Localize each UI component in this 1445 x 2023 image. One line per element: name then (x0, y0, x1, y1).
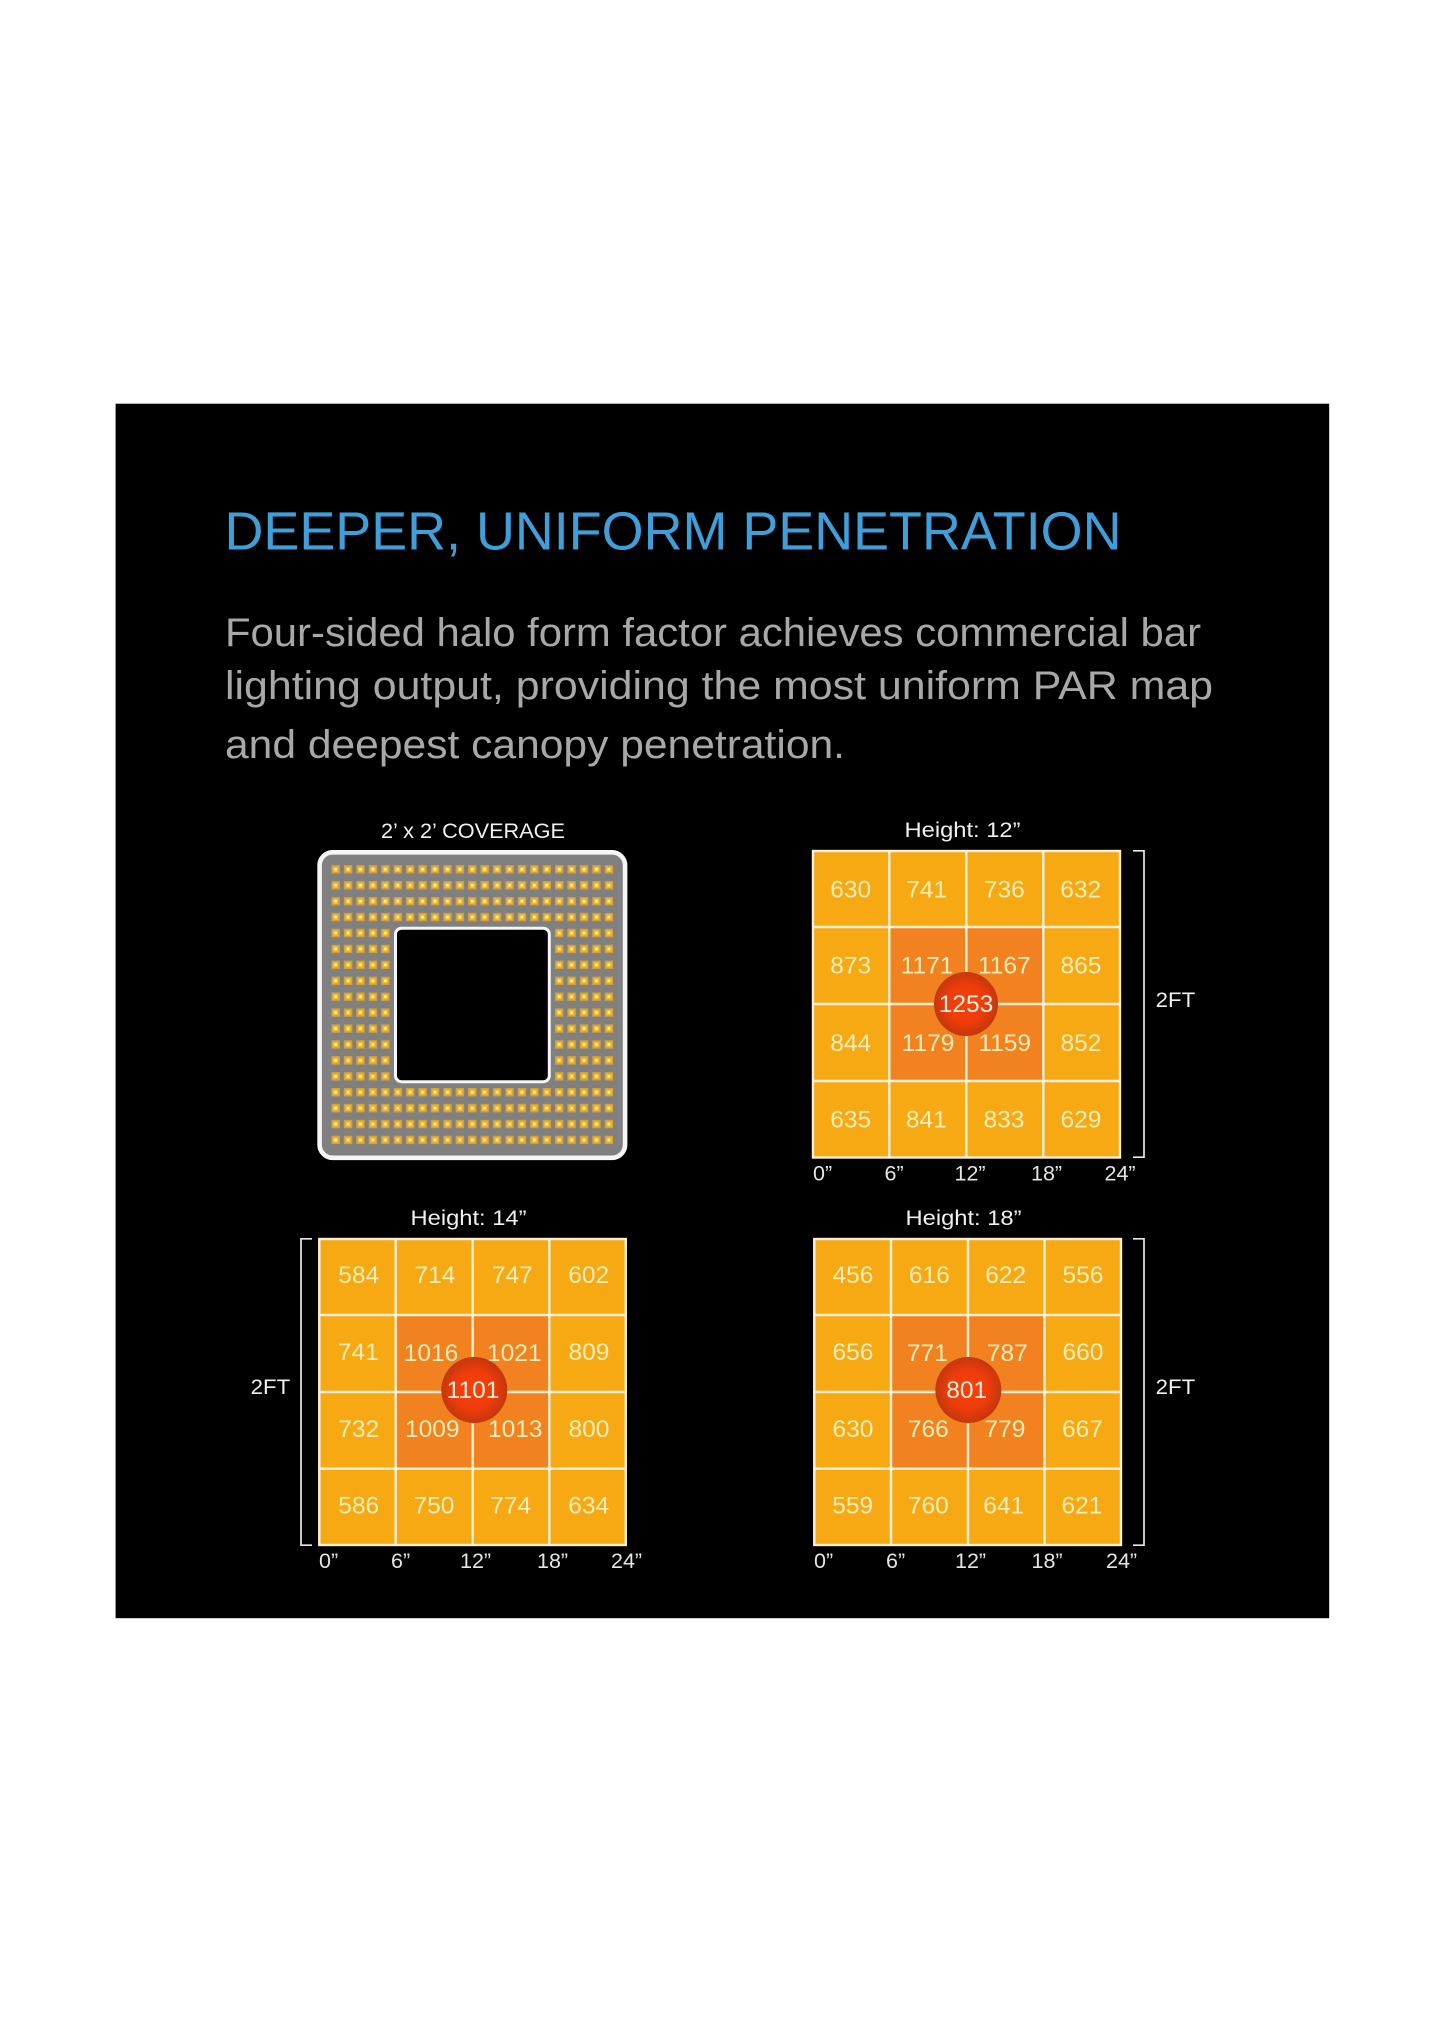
cell values: 456 (833, 1262, 873, 1289)
cell values: 622 (985, 1262, 1026, 1289)
halo light board (320, 852, 625, 1158)
axis labels (814, 1549, 1137, 1573)
grid lines (813, 1238, 1122, 1546)
label: 2FT: 2FT (1156, 1375, 1195, 1399)
axis labels (319, 1549, 642, 1573)
cell values: 1179 (902, 1030, 954, 1057)
cell values: 774 (490, 1492, 531, 1519)
cell values: 841 (906, 1106, 947, 1134)
axis labels: 18” (1031, 1162, 1062, 1186)
axis labels: 18” (537, 1549, 568, 1573)
peak value circle (935, 1357, 1001, 1423)
axis labels: 0” (813, 1162, 832, 1186)
cell values: 656 (833, 1339, 873, 1366)
cell values: 852 (1061, 1030, 1101, 1057)
cell values: 1021 (487, 1340, 542, 1367)
heading: height 14: Height: 14” (410, 1206, 526, 1230)
cell values: 747 (492, 1262, 533, 1289)
cell values: 634 (568, 1492, 609, 1519)
title: DEEPER, UNIFORM PENETRATION (224, 502, 1122, 562)
heading: coverage: 2’ x 2’ COVERAGE (381, 819, 565, 843)
axis labels: 24” (1106, 1549, 1137, 1573)
bracket: 2FT (1133, 851, 1144, 1157)
cell values: 844 (830, 1030, 871, 1057)
cell values: 632 (1060, 876, 1101, 903)
cell values: 667 (1062, 1416, 1103, 1443)
cell values: 1009 (405, 1416, 460, 1443)
cell values: 621 (1062, 1492, 1102, 1519)
grid lines (812, 850, 1121, 1158)
cell values: 641 (983, 1492, 1024, 1519)
cell values: 760 (908, 1492, 949, 1519)
cell values: 800 (569, 1416, 609, 1443)
cell values: 736 (984, 876, 1025, 903)
cell values: 1171 (901, 952, 953, 979)
outer cells (813, 1238, 1122, 1546)
axis labels: 6” (886, 1549, 905, 1573)
cell values: 741 (338, 1339, 379, 1366)
cell values: 732 (338, 1416, 379, 1443)
cell values: 586 (338, 1492, 379, 1519)
heat map: height 12 inches (812, 818, 1195, 1186)
cell values: 635 (830, 1106, 871, 1134)
cell values: 787 (987, 1340, 1028, 1367)
cell values: 873 (830, 952, 871, 979)
cell values: 556 (1063, 1262, 1103, 1289)
cell values: 771 (907, 1340, 948, 1367)
heading: height 12: Height: 12” (904, 818, 1020, 842)
axis labels: 12” (954, 1162, 986, 1186)
cell values: 559 (832, 1492, 873, 1519)
cell values: 630 (830, 876, 871, 903)
cell values: 1167 (978, 952, 1031, 979)
peak value circle: 801 (946, 1377, 987, 1404)
cell values: 602 (568, 1262, 609, 1289)
cell values (832, 1262, 1103, 1519)
cell values (338, 1262, 609, 1519)
center cutout (396, 928, 549, 1082)
heat map: height 14 inches (251, 1206, 642, 1573)
axis labels: 6” (884, 1162, 904, 1186)
inner cells (891, 1315, 1044, 1469)
cell values: 750 (414, 1492, 454, 1519)
cell values: 629 (1061, 1106, 1101, 1134)
cell values: 1016 (404, 1340, 458, 1367)
axis labels: 6” (391, 1549, 410, 1573)
cell values (830, 876, 1101, 1134)
cell values: 809 (569, 1339, 609, 1366)
label: 2FT: 2FT (1156, 988, 1195, 1012)
bracket: 2FT (1133, 1239, 1144, 1545)
LED array (331, 869, 615, 1140)
peak value circle: 1253 (939, 991, 993, 1018)
axis labels: 18” (1032, 1549, 1063, 1573)
cell values: 660 (1063, 1339, 1103, 1366)
cell values: 630 (833, 1416, 873, 1443)
panel: black background (116, 404, 1329, 1618)
peak value circle (441, 1357, 507, 1423)
text block: description (225, 611, 1213, 767)
cell values: 1159 (978, 1030, 1031, 1057)
cell values: 616 (909, 1262, 950, 1289)
text block: description: and deepest canopy penetration. (225, 723, 845, 767)
bracket: 2FT (301, 1239, 312, 1545)
text block: description: lighting output, providing the most uniform PAR map (225, 664, 1213, 708)
outer cells (318, 1238, 627, 1546)
axis labels: 24” (1104, 1162, 1136, 1186)
cell values: 741 (906, 876, 947, 903)
axis labels: 12” (460, 1549, 491, 1573)
axis labels: 0” (319, 1549, 338, 1573)
text block: description: Four-sided halo form factor achieves commercial bar (225, 611, 1201, 655)
panel: LED halo coverage diagram (320, 819, 625, 1158)
heat map: height 18 inches (813, 1206, 1195, 1573)
cell values: 766 (908, 1416, 949, 1443)
peak value circle (934, 972, 998, 1036)
cell values: 714 (415, 1262, 455, 1289)
cell values: 779 (985, 1416, 1025, 1443)
inner cells (889, 927, 1043, 1081)
grid lines (318, 1238, 627, 1546)
cell values: 833 (984, 1106, 1024, 1134)
axis labels: 0” (814, 1549, 833, 1573)
axis labels: 24” (611, 1549, 642, 1573)
label: 2FT: 2FT (251, 1375, 290, 1399)
outer cells (812, 850, 1121, 1158)
cell values: 584 (338, 1262, 379, 1289)
axis labels: 12” (955, 1549, 986, 1573)
cell values: 1013 (488, 1416, 543, 1443)
heading: height 18: Height: 18” (906, 1206, 1022, 1230)
peak value circle: 1101 (447, 1377, 499, 1404)
inner cells (396, 1315, 549, 1469)
cell values: 865 (1061, 952, 1101, 979)
axis labels (813, 1162, 1136, 1186)
